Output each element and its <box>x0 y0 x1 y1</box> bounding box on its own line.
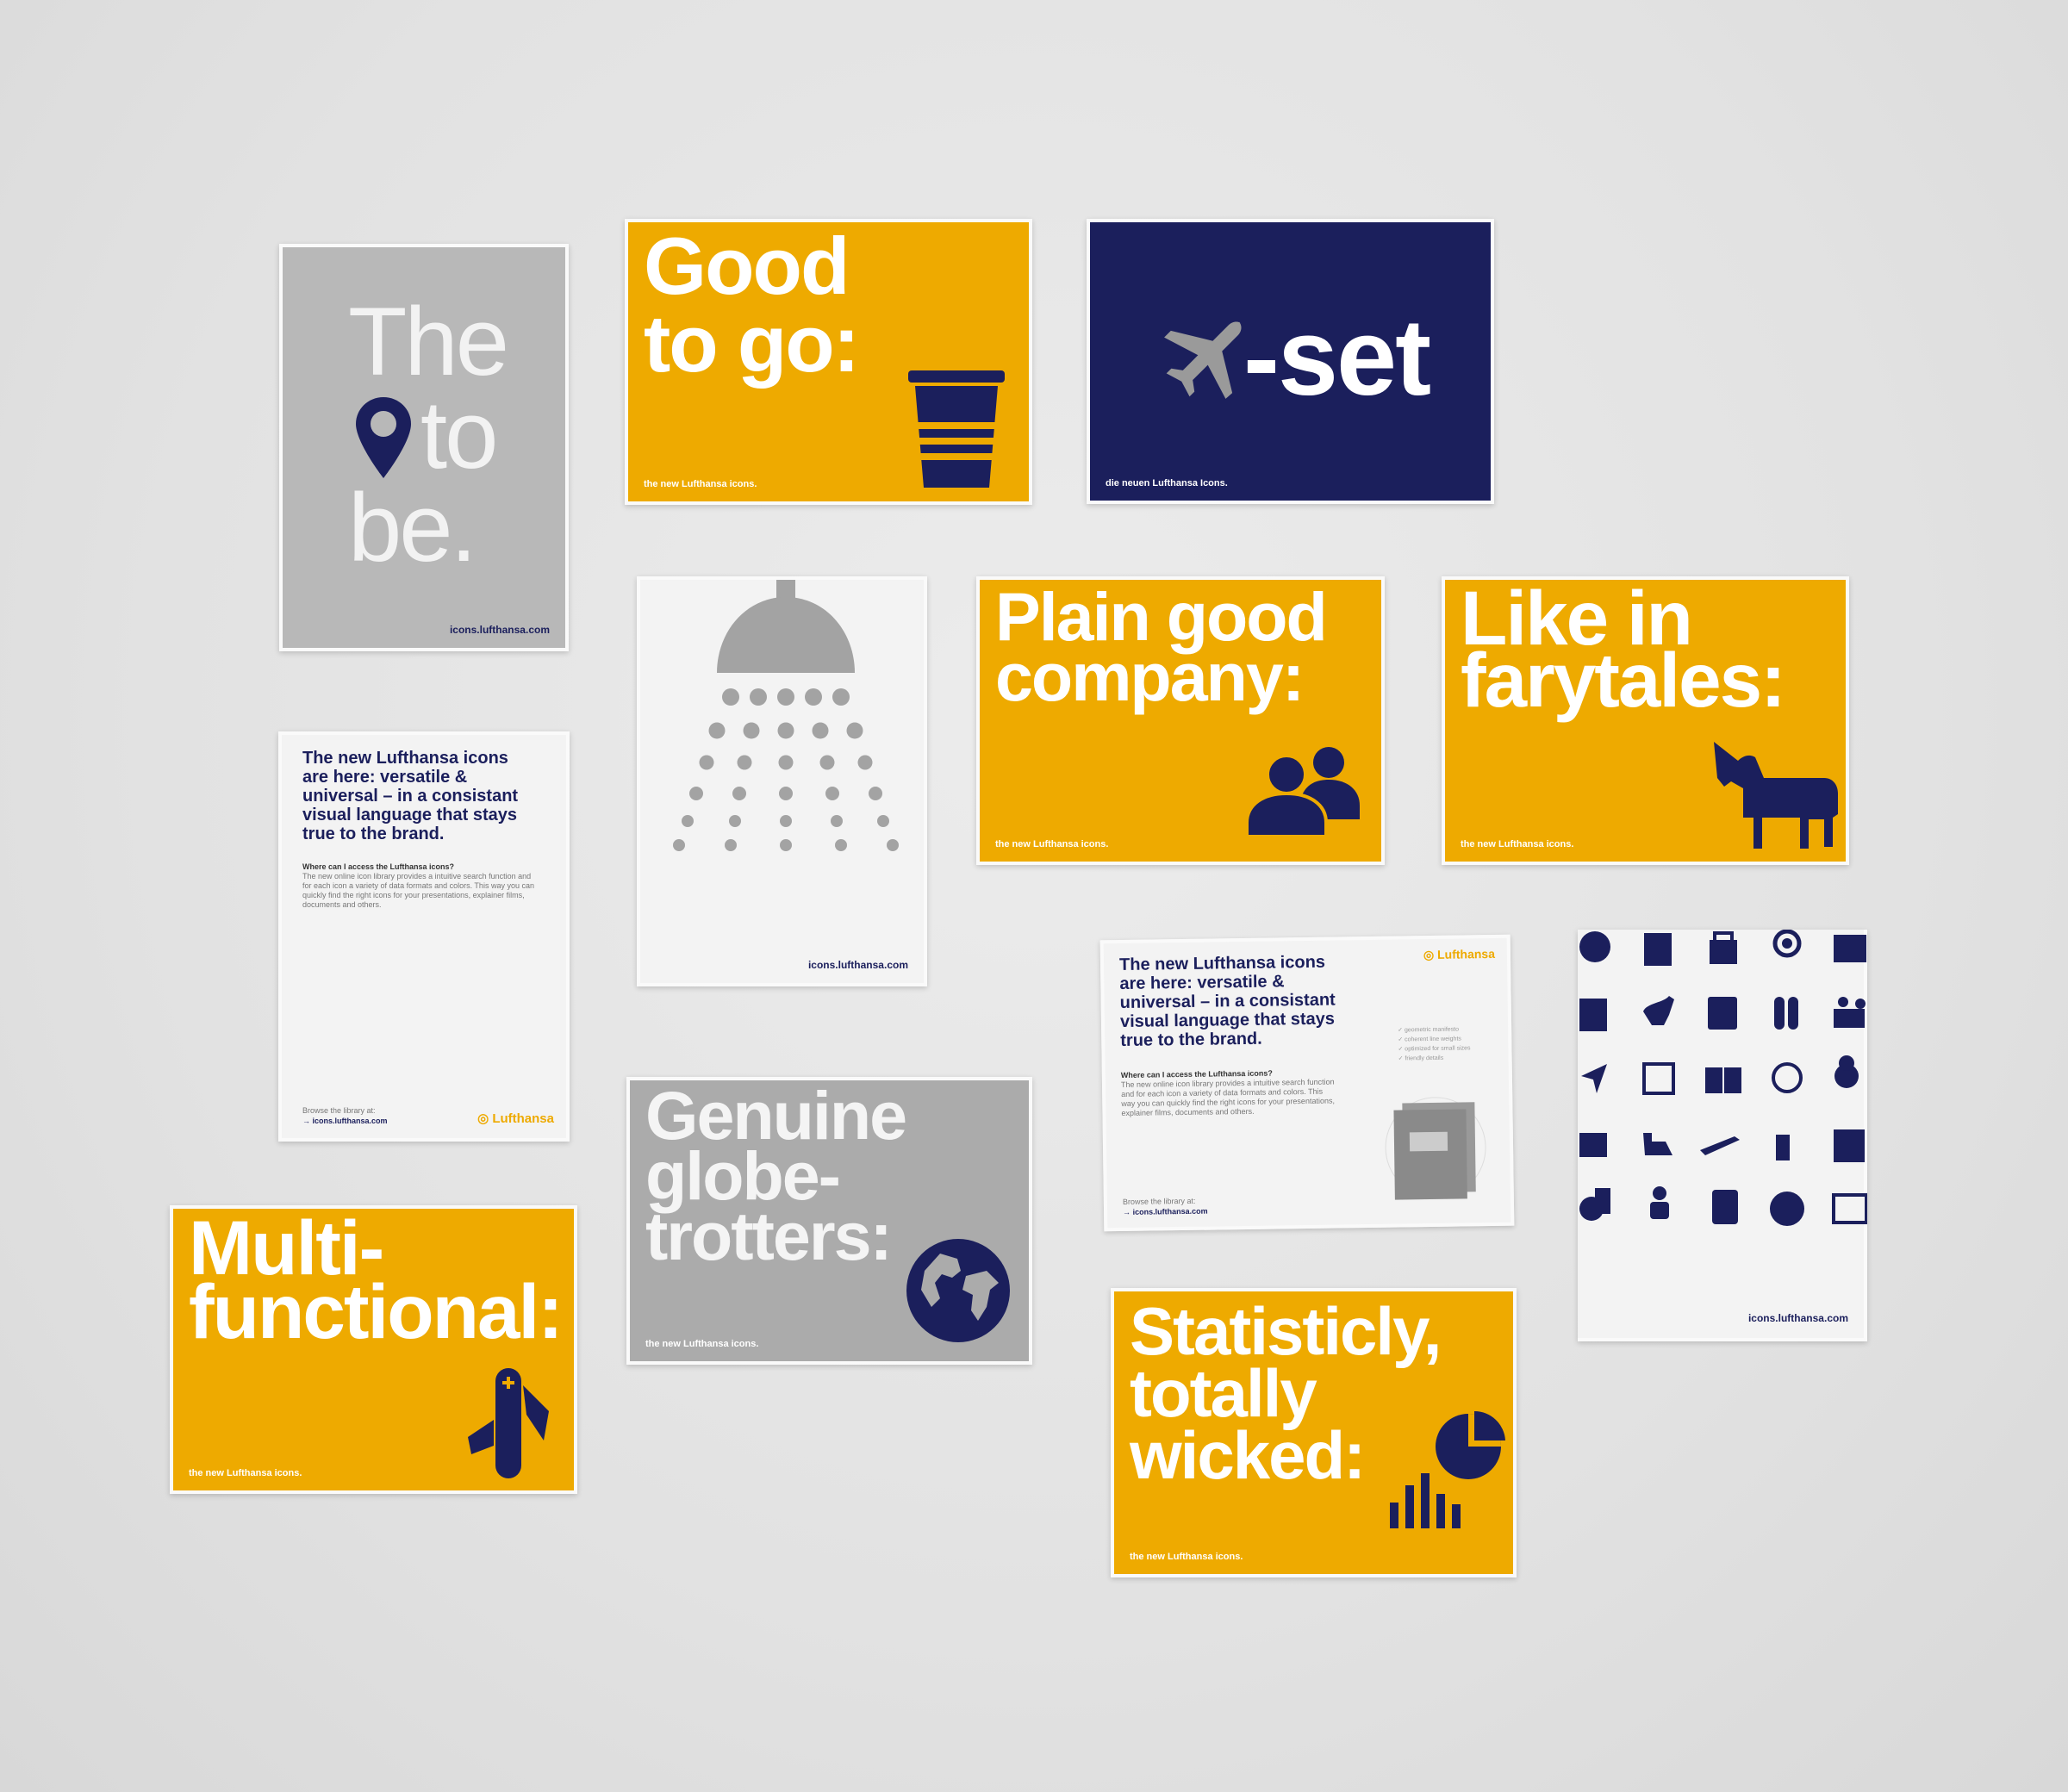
heading: The new Lufthansa icons are here: versatile & universal – in a consistant visual language that stays true to the brand. <box>1119 953 1336 1050</box>
headline: The to be: The <box>348 288 507 395</box>
headline: Statisticly, <box>1130 1293 1440 1369</box>
icon: shower <box>673 580 899 851</box>
heading: The new Lufthansa icons are here: versatile & universal – in a consistant visual language that stays true to the brand. <box>302 749 518 843</box>
footer: the new Lufthansa icons. <box>645 1339 758 1349</box>
icon: unicorn <box>1714 742 1838 849</box>
footer: the new Lufthansa icons. <box>995 839 1108 849</box>
headline: The to be <box>348 288 507 582</box>
headline: functional: <box>189 1268 562 1354</box>
headline <box>645 1077 906 1274</box>
headline <box>644 221 858 389</box>
logo: ◎ Lufthansa <box>1423 947 1495 961</box>
body text: Where can I access the Lufthansa icons? <box>1121 1069 1273 1080</box>
card: good to go <box>625 219 1032 505</box>
checklist <box>1398 1027 1471 1062</box>
headline <box>1461 575 1785 723</box>
footer link: Browse the library at: <box>302 1106 376 1115</box>
body text: The new online icon library provides a intuitive search function and for each icon a variety of data formats and colors. This way you can quickly find the right icons for your presentations, explainer films, documents and others. <box>1121 1078 1335 1117</box>
headline: to go: <box>644 298 858 389</box>
footer: the new Lufthansa icons. <box>1130 1552 1243 1562</box>
card: text info landscape <box>1100 935 1514 1231</box>
icon: chart <box>1390 1411 1505 1528</box>
url: icons.lufthansa.com <box>1748 1312 1848 1324</box>
icon: map pin <box>356 397 411 478</box>
checklist: ✓ coherent line weights <box>1398 1036 1461 1043</box>
url: icons.lufthansa.com <box>808 959 908 971</box>
card: the pin to be <box>279 244 569 651</box>
icon: cup <box>908 370 1005 488</box>
footer: die neuen Lufthansa Icons. <box>1106 478 1228 488</box>
headline: Genuine <box>645 1077 906 1154</box>
card: text info portrait <box>278 731 570 1142</box>
url: icons.lufthansa.com <box>450 624 550 636</box>
card: icon grid <box>1578 930 1867 1341</box>
headline: trotters: <box>645 1198 891 1274</box>
card: genuine globetrotters <box>626 1077 1032 1365</box>
headline: globe- <box>645 1137 839 1214</box>
headline: Like in <box>1461 575 1691 661</box>
footer link <box>1123 1197 1208 1216</box>
card: plane-set <box>1087 219 1494 504</box>
icon: book illustration <box>1386 1098 1486 1200</box>
headline: Plain good <box>995 578 1326 655</box>
icon: plane <box>1164 322 1241 399</box>
headline: farytales: <box>1461 637 1785 723</box>
checklist: ✓ friendly details <box>1398 1055 1443 1062</box>
card: multi-functional <box>170 1205 577 1494</box>
card: statisticly totally wicked <box>1111 1288 1517 1577</box>
body text: The new online icon library provides a intuitive search function and for each icon a variety of data formats and colors. This way you can quickly find the right icons for your presentations, explainer films, documents and others. <box>302 872 534 909</box>
headline: Multi- <box>189 1204 383 1291</box>
icon: swiss knife <box>468 1368 549 1478</box>
footer: the new Lufthansa icons. <box>644 479 757 489</box>
headline: company: <box>995 638 1303 715</box>
logo: ◎ Lufthansa <box>477 1111 554 1126</box>
headline: totally <box>1130 1355 1316 1431</box>
headline <box>1129 1293 1440 1493</box>
footer: the new Lufthansa icons. <box>1461 839 1573 849</box>
icon grid <box>1579 930 1867 1226</box>
checklist: ✓ geometric manifesto <box>1398 1027 1459 1034</box>
icon: people <box>1249 747 1360 835</box>
footer link: → icons.lufthansa.com <box>1123 1207 1208 1216</box>
headline <box>189 1204 562 1354</box>
headline: wicked: <box>1130 1417 1364 1493</box>
headline: The to be: be. <box>348 474 475 582</box>
body text: Where can I access the Lufthansa icons? <box>302 862 454 871</box>
card: shower <box>637 576 927 986</box>
icon: globe <box>906 1239 1010 1342</box>
card: like in farytales <box>1442 576 1849 865</box>
card: plain good company <box>976 576 1385 865</box>
footer: the new Lufthansa icons. <box>189 1468 302 1478</box>
footer link <box>302 1106 388 1125</box>
headline: -set: -set <box>1243 296 1430 418</box>
headline: Good <box>644 221 848 311</box>
footer link: → icons.lufthansa.com <box>302 1117 388 1125</box>
headline: The to be: to <box>420 381 495 488</box>
checklist: ✓ optimized for small sizes <box>1398 1045 1471 1053</box>
footer link: Browse the library at: <box>1123 1197 1196 1206</box>
headline <box>995 578 1326 715</box>
